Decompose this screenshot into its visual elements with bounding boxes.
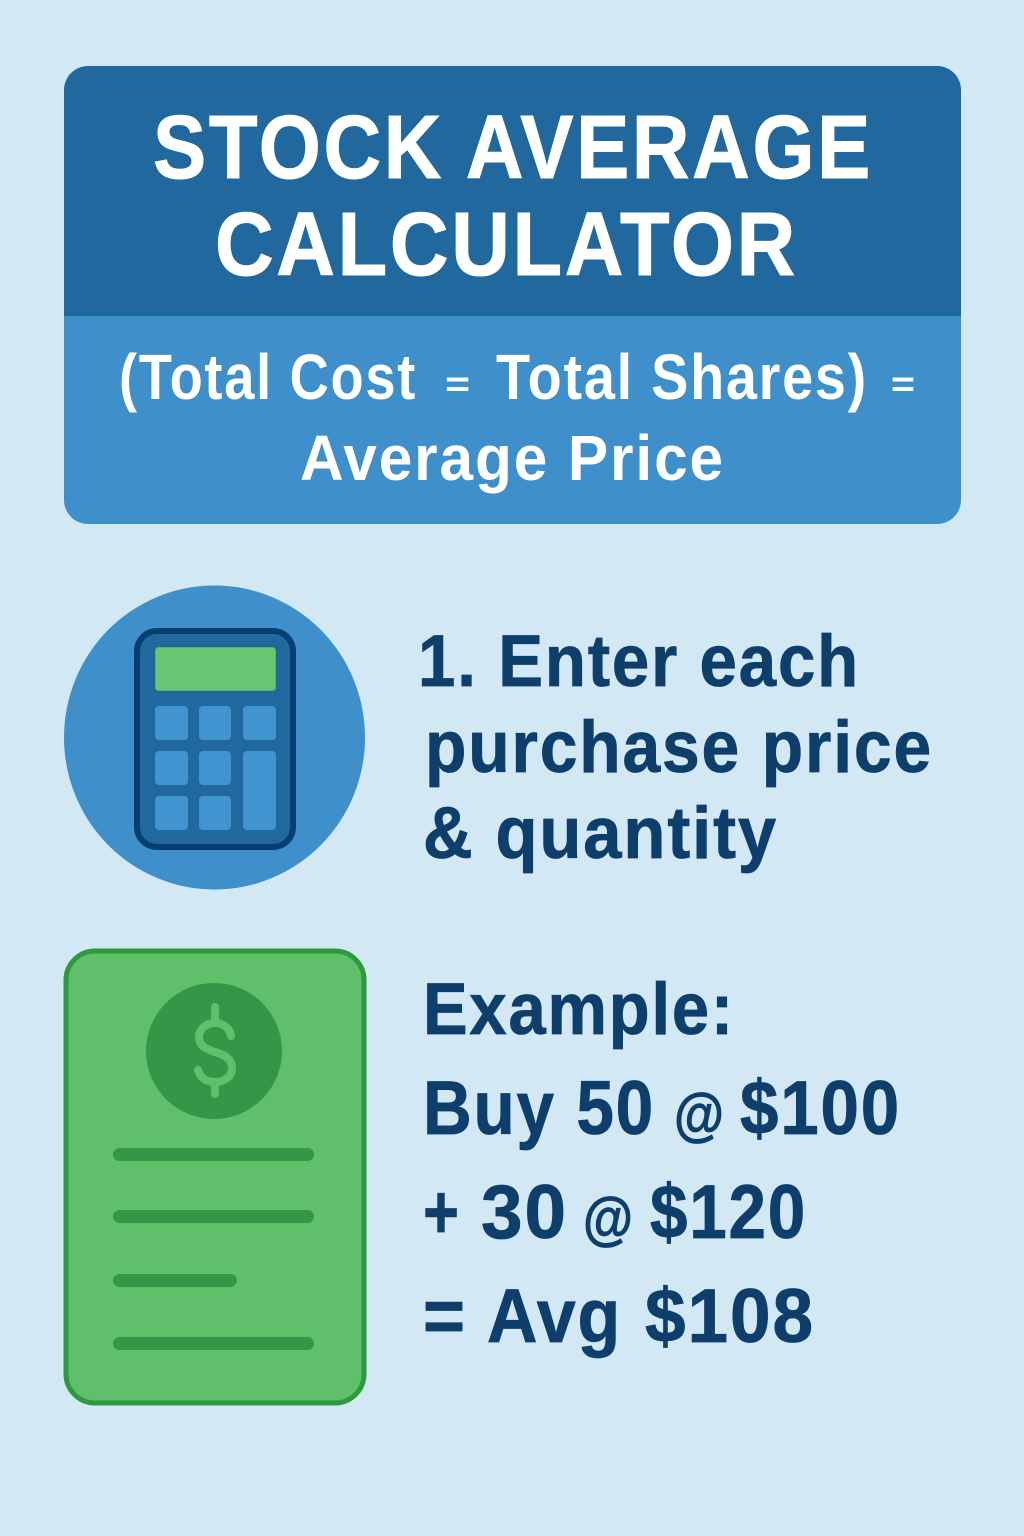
calculator keys [155, 706, 276, 830]
receipt lines [113, 1148, 314, 1350]
formula: Average Price [300, 422, 725, 494]
calculator screen [156, 648, 276, 690]
dollar sign [198, 1007, 232, 1094]
receipt card [66, 951, 364, 1403]
example text: $120 [650, 1170, 807, 1255]
example text: = [423, 1274, 465, 1359]
icon: calculator [64, 586, 365, 890]
header lower band [64, 316, 961, 524]
example text: Example: [423, 969, 735, 1050]
step text: 1. Enter each [418, 621, 860, 702]
icon: receipt [66, 951, 364, 1403]
example text: + [423, 1170, 459, 1255]
formula: = [891, 363, 915, 404]
formula: = [445, 363, 470, 404]
formula: (Total Cost [119, 341, 417, 413]
calculator body [137, 631, 293, 847]
header upper band [64, 66, 961, 316]
title: CALCULATOR [215, 195, 798, 295]
example text: Buy 50 [423, 1066, 655, 1151]
formula [119, 341, 915, 494]
calculator badge [64, 586, 365, 890]
example text: 30 [481, 1170, 568, 1255]
step text: & quantity [423, 793, 778, 874]
example text: Avg [487, 1274, 622, 1359]
example text [423, 969, 901, 1359]
title: STOCK AVERAGE [153, 98, 873, 198]
step text: purchase price [425, 707, 933, 788]
example text: @ [674, 1082, 724, 1147]
formula: Total Shares) [496, 341, 868, 413]
example text: $108 [645, 1274, 815, 1359]
example text: @ [583, 1186, 633, 1251]
panel: header [64, 66, 961, 524]
step text [418, 621, 933, 874]
title [153, 98, 873, 295]
example text: $100 [740, 1066, 901, 1151]
dollar coin [146, 983, 282, 1119]
